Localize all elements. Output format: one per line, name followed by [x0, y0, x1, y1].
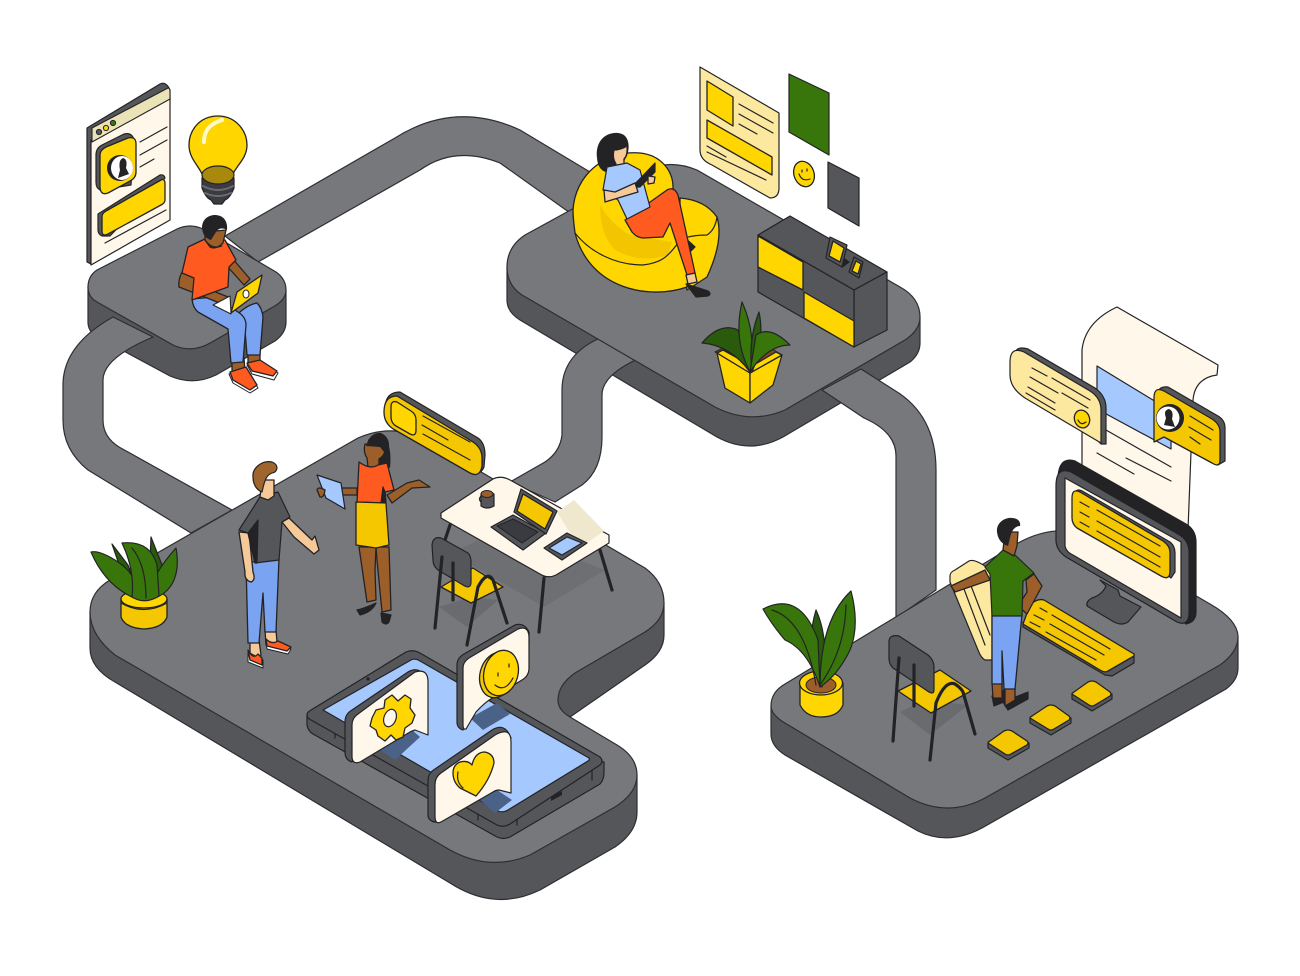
plant: top-right [702, 302, 790, 403]
chat bubble: yellow with avatar [1154, 387, 1225, 465]
chair: large platform [432, 538, 507, 645]
connector: top-right to large platform [510, 338, 640, 502]
platform top: top-right [507, 164, 920, 417]
icon: gear [370, 695, 415, 741]
person: standing on right platform [951, 518, 1042, 710]
chat bubble: pale [1010, 348, 1106, 444]
icon: heart [453, 752, 494, 796]
monitor chat bar [1072, 490, 1175, 578]
platform side: large notch [550, 603, 664, 717]
device: large tablet [307, 651, 604, 838]
person: man standing [239, 462, 319, 668]
icon: small smiley [1072, 408, 1092, 430]
person: reading on beanbag [597, 133, 710, 297]
picture frames [826, 237, 863, 278]
poster: layout card [700, 67, 779, 198]
tile: grey [828, 162, 859, 226]
person: seated with laptop [179, 215, 278, 393]
connector: top-left to large platform [63, 317, 232, 533]
icon: smiley [475, 646, 523, 702]
document sheet [1082, 307, 1218, 530]
card: gear [345, 670, 428, 763]
platform side: right [771, 637, 1238, 838]
keyboard [1023, 600, 1134, 676]
avatar card [96, 134, 136, 194]
plant: large platform [91, 537, 177, 629]
laptop [491, 489, 557, 550]
connector: top-left to top-right [225, 117, 600, 262]
browser window panel [87, 83, 170, 265]
plant: right platform [763, 591, 855, 717]
card: heart [428, 727, 511, 823]
connector: top-right to right platform [822, 369, 936, 618]
platform side: top-left [88, 287, 286, 381]
chair: right platform [889, 636, 975, 760]
beanbag [573, 153, 719, 292]
person: woman with tablet [317, 433, 430, 624]
icon: light bulb [189, 116, 247, 204]
platform side: top-right [507, 267, 920, 446]
coffee cup [480, 490, 494, 508]
tile: green [789, 74, 829, 155]
monitor stand [1087, 580, 1141, 624]
platform top: right [771, 531, 1238, 808]
scroll held by person [950, 560, 992, 660]
cabinet [758, 216, 887, 347]
platform top: top-left [88, 226, 286, 349]
speech plate: large platform [384, 392, 485, 474]
step tiles [988, 681, 1112, 760]
icon: smiley [790, 158, 818, 190]
platform top: large [90, 431, 664, 862]
desk with laptop and tablet [441, 477, 612, 632]
yellow bar [98, 175, 165, 236]
card: smiley [457, 624, 529, 730]
tablet on desk [544, 533, 587, 560]
monitor [1056, 460, 1196, 624]
platform side: large [90, 612, 637, 899]
